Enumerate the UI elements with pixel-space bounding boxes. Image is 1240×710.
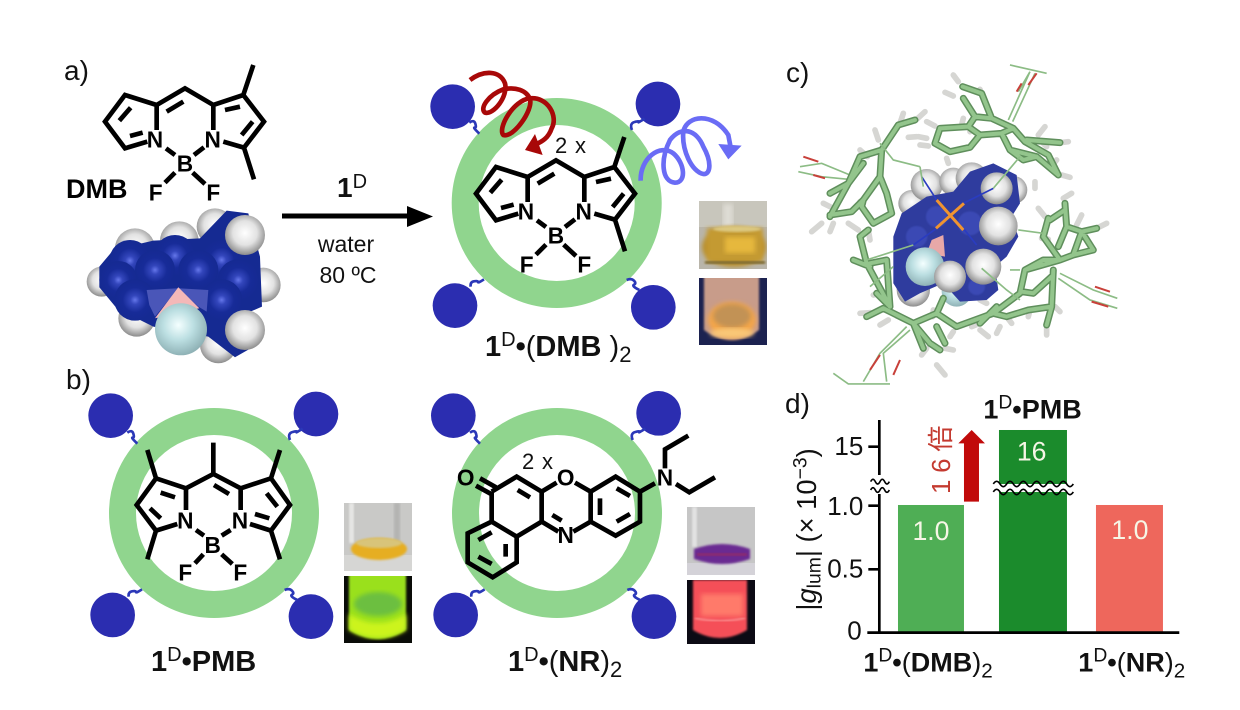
side chains (430, 82, 680, 330)
y axis title: lum (805, 557, 826, 588)
label NR: D (1093, 646, 1107, 667)
DMB guest: N (518, 198, 534, 224)
panel: d (785, 388, 1185, 683)
PMB guest: F (233, 560, 247, 586)
bar break (993, 481, 1073, 495)
vial daylight NR (687, 507, 755, 575)
label DMB: 2 (981, 660, 993, 683)
thin side strands (798, 65, 1117, 384)
reagent 1D: 1 (337, 172, 353, 203)
bar value labels (912, 437, 1148, 546)
label DMB: (DMB) (902, 648, 981, 678)
panel: c (786, 57, 1117, 384)
cage ring (466, 422, 648, 604)
caption: 1 (151, 646, 167, 678)
hydrogens (812, 75, 1107, 375)
DMB structure: N (204, 126, 221, 152)
panel: b (66, 364, 755, 682)
bar value labels: 16 (1017, 437, 1046, 467)
y tick labels: 0 (847, 615, 862, 645)
red circular polarised arrow (470, 73, 554, 155)
cage ring (465, 112, 648, 294)
vial UV PMB (344, 576, 412, 643)
DMB structure: F (206, 180, 220, 206)
label d: d) (785, 388, 810, 419)
label NR: (NR) (1117, 648, 1174, 678)
Nile red guest: N (557, 522, 574, 548)
PMB guest: F (178, 560, 192, 586)
bar value labels: 1.0 (912, 516, 950, 546)
Nile red guest (457, 436, 715, 577)
reagent 1D: D (353, 171, 367, 193)
DMB structure: N (147, 126, 163, 152)
DMB guest (476, 137, 635, 278)
cage thin links (867, 143, 1043, 300)
label PMB: D (998, 392, 1012, 413)
vial UV NR (687, 580, 755, 644)
label DMB: 1 (863, 648, 878, 678)
space-filling guest (893, 162, 1027, 307)
bar PMB (999, 430, 1067, 633)
y tick labels: 1.0 (827, 491, 863, 521)
vial daylight DMB (699, 201, 767, 269)
16 fold label: 1 6 倍 (926, 426, 956, 494)
caption: • (516, 331, 526, 363)
crystal structure model (798, 65, 1117, 384)
label PMB: • (1012, 394, 1022, 424)
Nile red guest: O (457, 465, 474, 491)
label DMB: D (878, 646, 892, 667)
label NR: 2 (1174, 660, 1185, 683)
y tick labels (827, 431, 863, 645)
complex 1D NR2 (431, 391, 755, 682)
panel: a (64, 55, 281, 363)
PMB guest (137, 443, 290, 586)
side chains (431, 391, 681, 639)
label NR: 1 (1078, 648, 1093, 678)
label DMB: • (892, 648, 902, 678)
label NR: • (1107, 648, 1117, 678)
Nile red guest: N (657, 465, 673, 491)
condition: water: water (317, 231, 374, 257)
y axis title: ) (791, 448, 822, 457)
caption: • (182, 646, 192, 678)
PMB guest: N (232, 508, 248, 534)
side chains (88, 392, 338, 639)
DMB guest: B (548, 222, 564, 248)
caption: (NR) (549, 646, 610, 678)
orange stacked guest (936, 200, 964, 230)
DMB structure: B (177, 150, 193, 176)
complex 1D PMB (88, 392, 412, 678)
vial UV DMB (699, 278, 767, 345)
y tick labels: 15 (834, 431, 863, 461)
DMB structure: F (149, 180, 163, 206)
label b: b) (66, 364, 91, 395)
y axis title: |g (791, 588, 822, 611)
axes (867, 420, 1179, 633)
DMB name: DMB (66, 174, 128, 204)
space-filling model of DMB (87, 208, 281, 363)
y axis title: | (× 10 (791, 479, 822, 557)
cage ring (122, 422, 306, 604)
caption: D (501, 329, 516, 351)
guest sticks (913, 177, 993, 245)
DMB guest: F (520, 252, 534, 278)
bar value labels: 1.0 (1111, 515, 1148, 545)
caption: 1 (485, 331, 501, 363)
blue circular polarised arrow (641, 118, 742, 183)
PMB guest: B (204, 532, 221, 558)
caption: 1 (508, 646, 524, 678)
DMB structure (105, 65, 264, 206)
bar chart (791, 392, 1185, 683)
caption: D (167, 644, 182, 666)
caption: PMB (192, 646, 256, 678)
bar DMB (898, 505, 964, 633)
label PMB: 1 (983, 394, 998, 424)
caption: 2 (619, 342, 631, 367)
label c: c) (786, 57, 809, 88)
2 x: 2 x (555, 133, 586, 158)
bar NR (1096, 505, 1163, 633)
caption: 2 (610, 657, 622, 682)
label PMB: PMB (1022, 394, 1082, 424)
label a: a) (64, 55, 89, 86)
caption: (DMB ) (526, 331, 619, 363)
complex 1D DMB2 cage (430, 73, 767, 367)
caption: D (524, 644, 539, 666)
2 x: 2 x (522, 449, 553, 474)
Nile red guest: O (557, 465, 574, 491)
axis break mark (871, 479, 889, 492)
PMB guest: N (177, 508, 194, 534)
cage sticks (830, 87, 1097, 350)
DMB guest: F (577, 252, 591, 278)
caption: • (539, 646, 549, 678)
vial daylight PMB (344, 503, 412, 571)
red increase arrow (958, 430, 985, 502)
reaction arrow (282, 206, 433, 227)
condition: 80 ºC: 80 ºC (320, 262, 376, 288)
y tick labels: 0.5 (827, 553, 863, 583)
DMB guest: N (575, 198, 592, 224)
y axis title: −3 (791, 457, 812, 479)
